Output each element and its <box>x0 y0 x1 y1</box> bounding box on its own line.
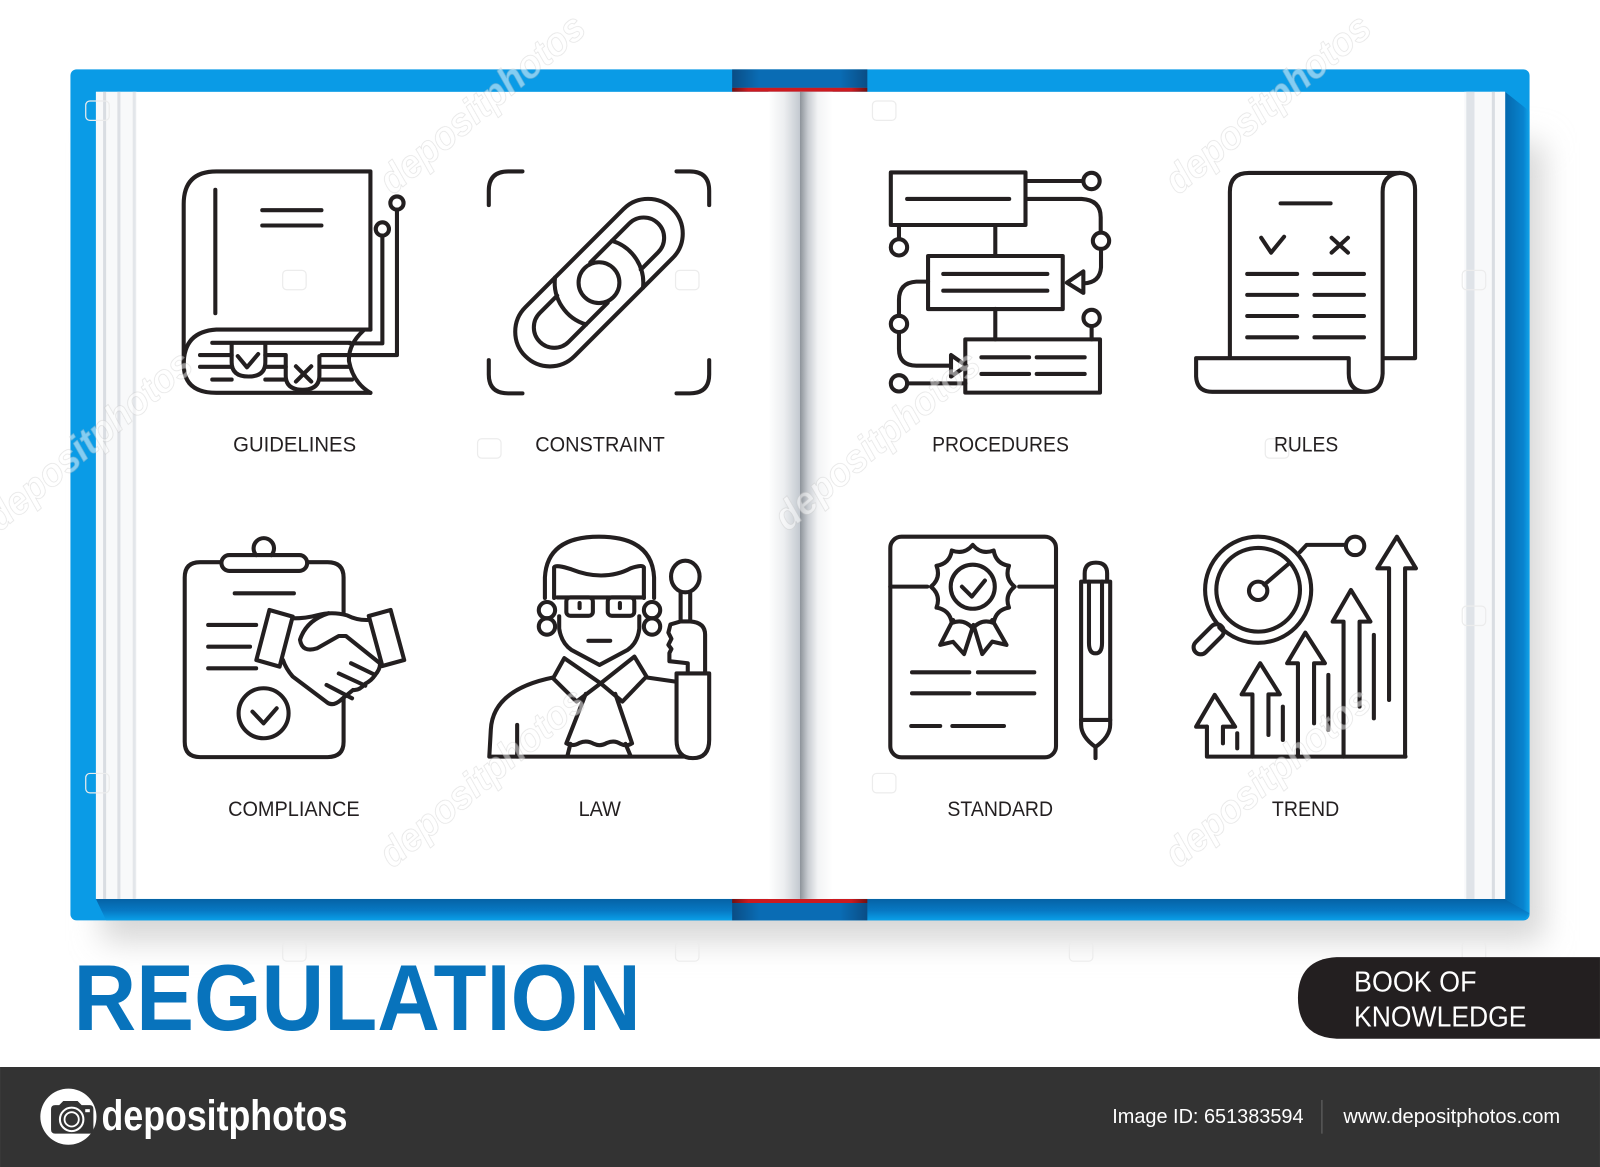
label: standard: STANDARD <box>947 798 1053 821</box>
title: REGULATION <box>73 945 641 1050</box>
icon: judge with gavel <box>489 537 709 758</box>
icon: magnifier and growth arrows <box>1191 537 1416 757</box>
panel: compliance <box>185 538 404 821</box>
icon: chain link in frame <box>489 171 709 393</box>
label: compliance: COMPLIANCE <box>228 798 360 821</box>
watermark camera marks <box>86 101 1486 961</box>
footer bar <box>0 1067 1600 1167</box>
divider <box>1321 1100 1322 1134</box>
logo text: depositphotos <box>102 1092 347 1140</box>
label: law: LAW <box>579 798 621 821</box>
book cover <box>70 69 1530 920</box>
watermarks <box>0 6 1380 876</box>
icon: certificate and pen <box>890 537 1110 758</box>
icon: flow chart <box>891 172 1109 393</box>
watermarks: depositphotos <box>1157 6 1380 203</box>
book spine top <box>732 69 867 92</box>
watermarks: depositphotos <box>371 6 594 203</box>
badge: book of knowledge: BOOK OF <box>1354 967 1477 999</box>
icon: book with shields <box>184 171 404 393</box>
panel: guidelines <box>184 171 404 457</box>
badge: book of knowledge <box>1298 957 1600 1039</box>
panel: constraint <box>489 171 709 457</box>
pages <box>96 92 1505 899</box>
panel: procedures <box>891 172 1109 457</box>
panel: trend <box>1191 537 1416 821</box>
icon: scroll with rules <box>1196 173 1415 392</box>
badge: book of knowledge: KNOWLEDGE <box>1354 1001 1527 1033</box>
watermarks: depositphotos <box>1157 679 1380 876</box>
book spine bottom <box>732 899 867 920</box>
label: rules: RULES <box>1274 434 1338 457</box>
watermarks: depositphotos <box>371 679 594 876</box>
book <box>70 69 1543 941</box>
image id: Image ID: 651383594 <box>1112 1106 1304 1128</box>
panel: law <box>489 537 709 821</box>
book shadow <box>102 143 1543 941</box>
watermarks: depositphotos <box>766 343 989 540</box>
icon: clipboard and handshake <box>185 538 404 757</box>
icon: camera logo <box>40 1089 96 1145</box>
panel: standard <box>890 537 1110 821</box>
label: procedures: PROCEDURES <box>932 434 1069 457</box>
panel: rules <box>1196 173 1415 457</box>
label: guidelines: GUIDELINES <box>233 434 356 457</box>
website: www.depositphotos.com <box>1342 1106 1560 1128</box>
label: constraint: CONSTRAINT <box>535 434 665 457</box>
label: trend: TREND <box>1272 798 1339 821</box>
